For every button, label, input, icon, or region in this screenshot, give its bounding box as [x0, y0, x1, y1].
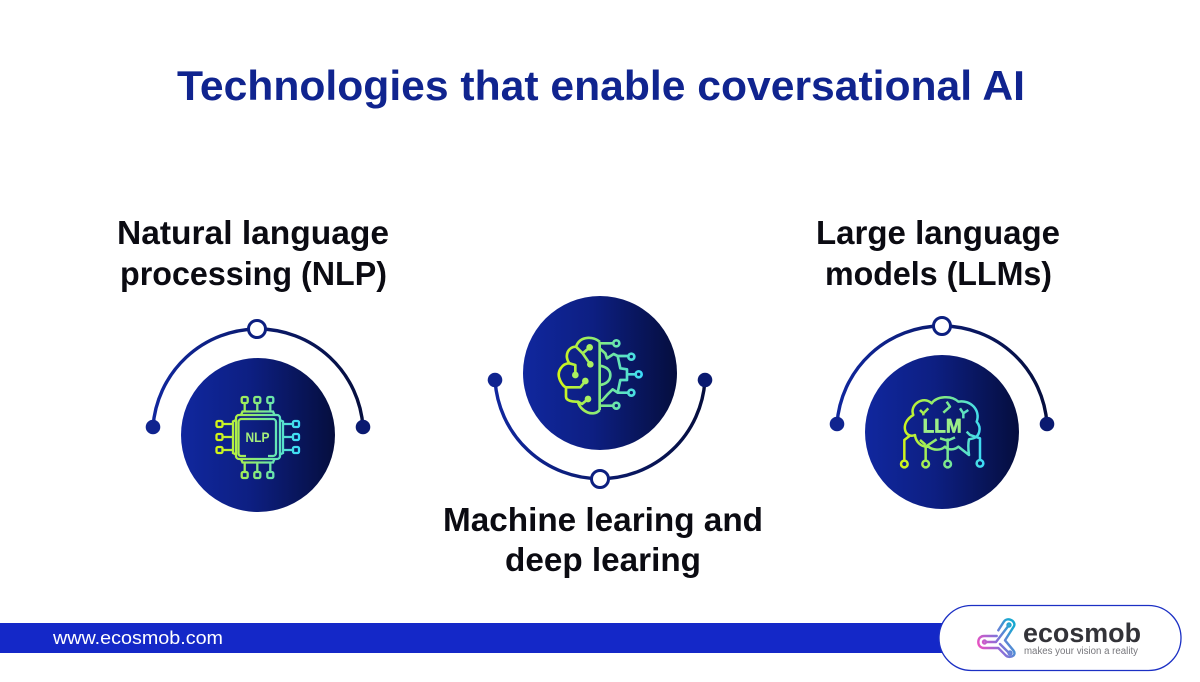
circle: NLP: [181, 358, 335, 512]
arc: machine learning: [488, 373, 712, 488]
footer url: www.ecosmob.com: [52, 628, 223, 648]
logo tagline: makes your vision a reality: [1024, 646, 1138, 657]
icon: ecosmob logo mark: [978, 619, 1014, 657]
panel: LLM graphic: [830, 318, 1054, 509]
heading: machine learning: [443, 501, 763, 578]
icon: NLP chip: NLP: [246, 429, 270, 445]
circle: machine learning: [523, 296, 677, 450]
heading: natural language processing: Natural language: [117, 214, 389, 251]
panel: machine learning graphic: [488, 296, 712, 488]
arc: NLP: [146, 320, 370, 434]
circle: LLM: [865, 355, 1019, 509]
footer bar: [0, 623, 960, 653]
heading: large language models: models (LLMs): [825, 255, 1052, 292]
icon: brain circuit: [559, 338, 642, 413]
icon: NLP chip: [216, 397, 299, 478]
panel: NLP graphic: [146, 320, 370, 512]
heading: large language models: Large language: [816, 214, 1060, 251]
heading: large language models: [816, 214, 1060, 292]
heading: machine learning: deep learing: [505, 541, 701, 578]
icon: LLM brain: LLM: [923, 416, 962, 437]
logo badge: [939, 606, 1181, 670]
arc: LLM: [830, 318, 1054, 431]
title: Technologies that enable coversational AI: [177, 62, 1025, 109]
icon: LLM brain: [901, 397, 983, 467]
heading: natural language processing: [117, 214, 389, 292]
heading: natural language processing: processing (NLP): [120, 255, 387, 292]
heading: machine learning: Machine learing and: [443, 501, 763, 538]
logo wordmark: ecosmob: [1023, 618, 1141, 648]
